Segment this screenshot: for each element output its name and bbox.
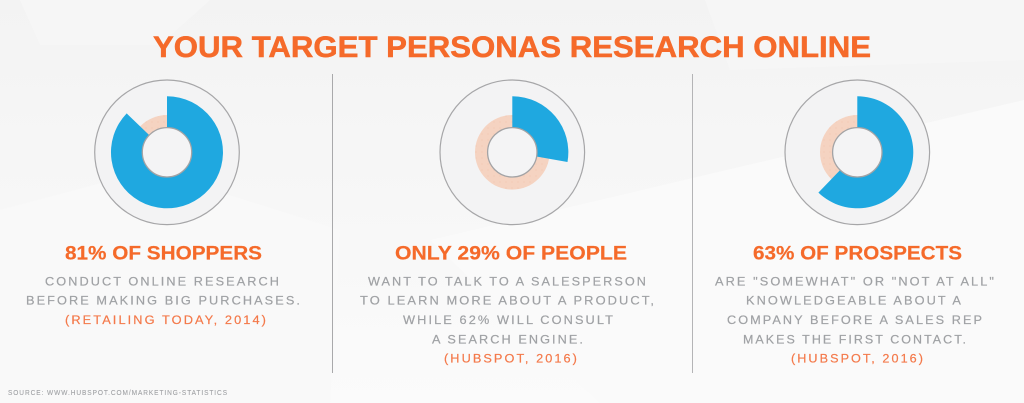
description — [26, 274, 302, 308]
donut chart: 81% — [95, 80, 239, 225]
panel: only 29% of people — [360, 80, 656, 366]
citation: (HUBSPOT, 2016) — [444, 352, 579, 366]
heading: 63% OF PROSPECTS — [753, 243, 962, 264]
description: COMPANY BEFORE A SALES REP — [727, 313, 984, 327]
donut chart: 29% — [440, 80, 585, 225]
description: KNOWLEDGEABLE ABOUT A — [746, 294, 963, 308]
donut chart: 63% — [785, 80, 930, 225]
description: WHILE 62% WILL CONSULT — [403, 313, 615, 327]
description: A SEARCH ENGINE. — [432, 332, 585, 346]
heading: ONLY 29% OF PEOPLE — [395, 243, 627, 264]
description: ARE "SOMEWHAT" OR "NOT AT ALL" — [715, 274, 996, 288]
description: WANT TO TALK TO A SALESPERSON — [368, 274, 648, 288]
description: BEFORE MAKING BIG PURCHASES. — [26, 294, 302, 308]
heading: 81% OF SHOPPERS — [65, 243, 262, 264]
divider left — [332, 74, 333, 373]
panel: 63% of prospects — [715, 80, 996, 366]
description — [715, 274, 996, 346]
source note: SOURCE: WWW.HUBSPOT.COM/MARKETING-STATISTICS — [8, 390, 228, 397]
description: MAKES THE FIRST CONTACT. — [743, 332, 968, 346]
divider right — [692, 74, 693, 373]
citation: (RETAILING TODAY, 2014) — [65, 313, 268, 327]
description — [360, 274, 656, 346]
panel: 81% of shoppers — [26, 80, 302, 327]
title: YOUR TARGET PERSONAS RESEARCH ONLINE — [153, 31, 871, 64]
description: TO LEARN MORE ABOUT A PRODUCT, — [360, 294, 656, 308]
description: CONDUCT ONLINE RESEARCH — [45, 274, 281, 288]
citation: (HUBSPOT, 2016) — [791, 352, 925, 366]
